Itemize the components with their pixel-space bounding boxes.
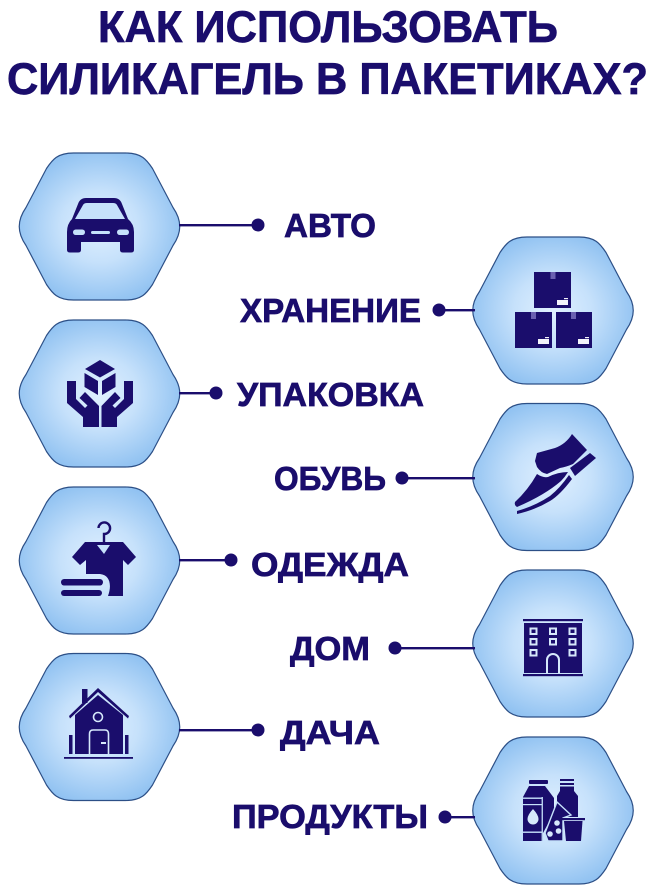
label: хранение: ХРАНЕНИЕ [240,293,421,330]
panel: хранение [240,237,633,384]
panel: дом [290,570,633,717]
connector: продукты [438,810,475,824]
connector: хранение [432,304,475,316]
label: дача: ДАЧА [280,715,380,752]
icon: shoe [515,434,596,514]
panel: дача [19,654,380,800]
connector: одежда [179,554,238,566]
label: продукты: ПРОДУКТЫ [232,799,428,836]
panel: продукты [232,737,633,884]
label: упаковка: УПАКОВКА [237,377,424,414]
label: дом: ДОМ [290,631,370,668]
connector: авто [179,218,264,232]
connector: обувь [396,472,475,484]
panel: обувь [274,404,633,550]
icon: boxes [515,272,592,348]
icon: building [523,619,583,676]
icon: house [64,688,133,759]
panel: одежда [19,487,409,634]
connector: дом [388,642,475,654]
icon: shirt on hanger [61,522,136,596]
panel: упаковка [19,320,424,467]
connector: дача [179,724,264,736]
title: СИЛИКАГЕЛЬ В ПАКЕТИКАХ? [7,55,648,104]
label: одежда: ОДЕЖДА [251,547,409,584]
label: авто: АВТО [284,208,376,245]
panel: авто [19,153,376,300]
connector: упаковка [179,386,222,400]
icon: car [67,198,134,252]
label: обувь: ОБУВЬ [274,461,386,498]
icon: hands holding box [67,360,133,427]
title: КАК ИСПОЛЬЗОВАТЬ [98,3,558,52]
icon: groceries [523,779,585,841]
title [7,3,648,104]
